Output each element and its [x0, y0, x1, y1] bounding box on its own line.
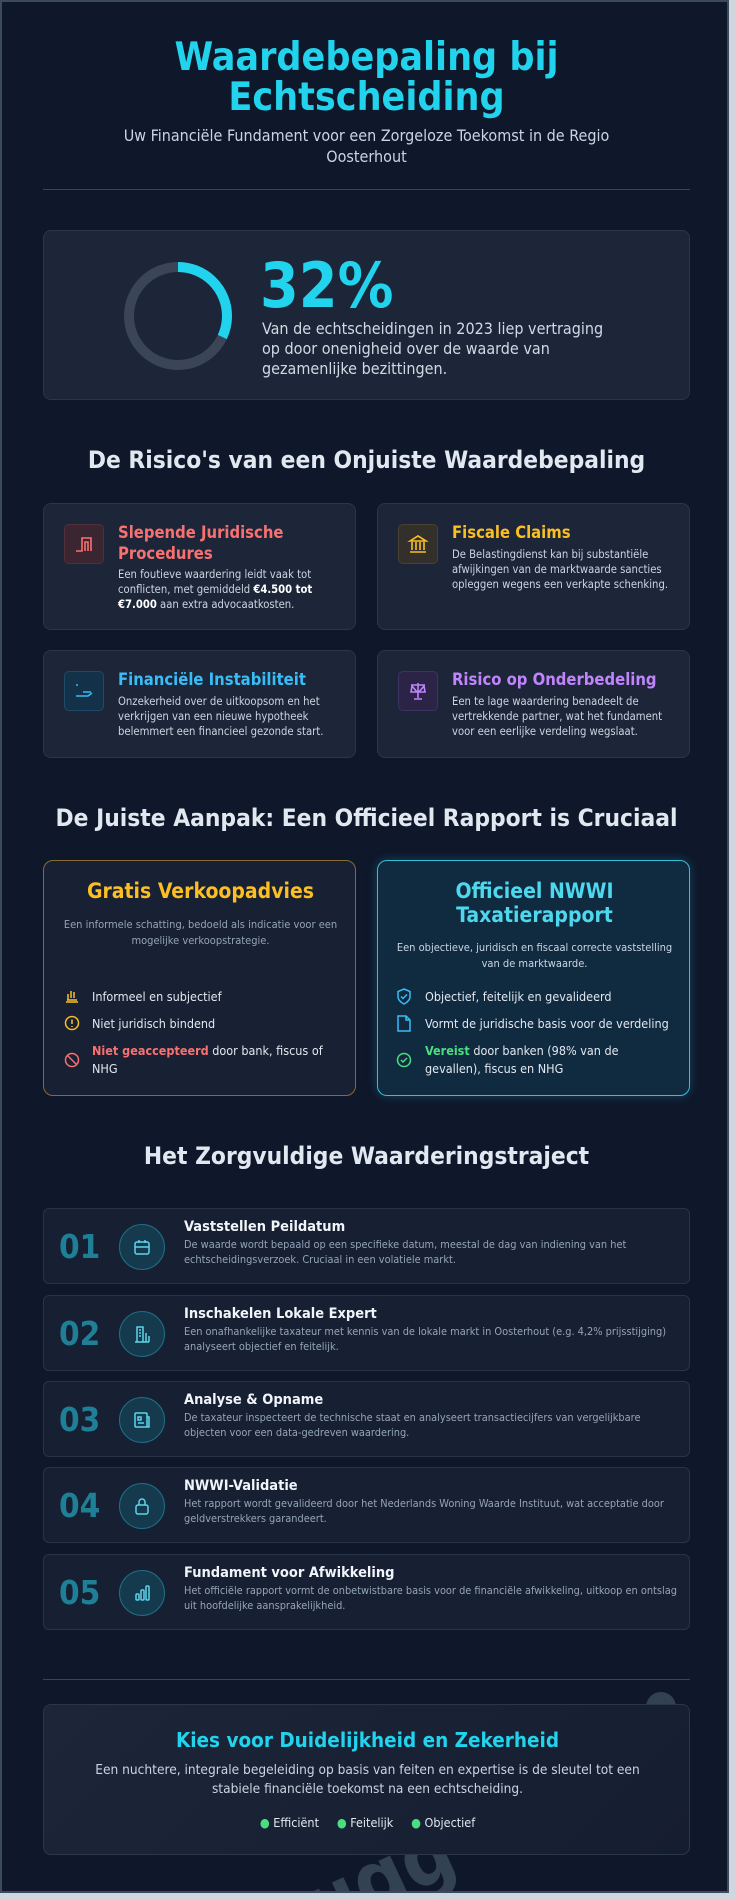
- step 03: [43, 1381, 690, 1457]
- list: nadelen: Niet juridisch bindend: [92, 1016, 215, 1031]
- step 02: Een onafhankelijke taxateur met kennis van de lokale markt in Oosterhout (e.g. 4,2% prijsstijging) analyseert objectief en feitelijk.: [184, 1325, 666, 1353]
- icon: bank: [398, 524, 438, 564]
- panel: juridische procedures: Een foutieve waardering leidt vaak tot conflicten, met gemiddeld €4.500 tot €7.000 aan extra advocaatkosten.: [118, 568, 312, 611]
- icon: building: [64, 524, 104, 564]
- list: nadelen: Niet geaccepteerd door bank, fiscus of NHG: [92, 1043, 323, 1076]
- icon: money hand: [64, 671, 104, 711]
- panel: gratis verkoopadvies: [43, 860, 356, 1096]
- list: voordelen: Vormt de juridische basis voor de verdeling: [425, 1016, 669, 1031]
- step 01: 01: [59, 1227, 100, 1266]
- step 05: Het officiële rapport vormt de onbetwistbare basis voor de financiële afwikkeling, uitkoop en ontslag uit hoofdelijke aansprakelijkheid.: [184, 1584, 677, 1612]
- list: voordelen: Vereist door banken (98% van de gevallen), fiscus en NHG: [425, 1043, 619, 1076]
- panel: juridische procedures: [43, 503, 356, 630]
- step 02: Inschakelen Lokale Expert: [184, 1306, 377, 1322]
- step 04: 04: [59, 1486, 100, 1525]
- panel: call to action: Kies voor Duidelijkheid en Zekerheid: [176, 1728, 559, 1752]
- step 01: [43, 1208, 690, 1284]
- panel: onderbedeling: Risico op Onderbedeling: [452, 670, 657, 689]
- step 05: 05: [59, 1573, 100, 1612]
- panel: financiele instabiliteit: [43, 650, 356, 758]
- panel: fiscale claims: [377, 503, 690, 630]
- icon: scale: [398, 671, 438, 711]
- title: Waardebepaling bij: [174, 35, 559, 80]
- step 02: 02: [59, 1314, 100, 1353]
- step 02: [43, 1295, 690, 1371]
- stat text: Van de echtscheidingen in 2023 liep vertraging op door onenigheid over de waarde van gezamenlijke bezittingen.: [262, 319, 603, 378]
- stat number: 32%: [260, 249, 394, 322]
- panel: onderbedeling: [377, 650, 690, 758]
- panel: gratis verkoopadvies: Een informele schatting, bedoeld als indicatie voor een mogelijke verkoopstrategie.: [64, 918, 337, 947]
- donut chart 32%: [124, 262, 232, 370]
- icon: warning: [64, 1016, 80, 1030]
- heading: risks: De Risico's van een Onjuiste Waardebepaling: [88, 445, 645, 474]
- panel: fiscale claims: Fiscale Claims: [452, 523, 571, 542]
- panel: call to action: Een nuchtere, integrale begeleiding op basis van feiten en expertise is de sleutel tot een stabiele financiële toekomst na een echtscheiding.: [95, 1762, 640, 1797]
- step 05: [43, 1554, 690, 1630]
- panel: officieel rapport: Taxatierapport: [456, 903, 613, 927]
- panel: call to action: [43, 1704, 690, 1855]
- list: voordelen: Objectief, feitelijk en gevalideerd: [425, 989, 612, 1004]
- panel: officieel rapport: Officieel NWWI: [455, 879, 614, 903]
- title: Echtscheiding: [228, 75, 505, 120]
- heading: approach: De Juiste Aanpak: Een Officieel Rapport is Cruciaal: [56, 803, 677, 832]
- list: nadelen: Informeel en subjectief: [92, 989, 222, 1004]
- title: [174, 35, 559, 120]
- step 04: NWWI-Validatie: [184, 1478, 298, 1494]
- panel: fiscale claims: De Belastingdienst kan bij substantiële afwijkingen van de marktwaarde sancties opleggen wegens een verkapte schenking.: [452, 548, 668, 591]
- step 05: Fundament voor Afwikkeling: [184, 1565, 394, 1581]
- step 03: Analyse & Opname: [184, 1392, 323, 1408]
- list: voordelen: [396, 988, 669, 1076]
- panel: gratis verkoopadvies: Gratis Verkoopadvies: [87, 879, 314, 903]
- panel: onderbedeling: Een te lage waardering benadeelt de vertrekkende partner, wat het fundament voor een eerlijke verdeling wegslaat.: [452, 695, 662, 738]
- icon: document: [397, 1015, 411, 1032]
- step 03: De taxateur inspecteert de technische staat en analyseert transactiecijfers van vergelijkbare objecten voor een data-gedreven waardering.: [184, 1411, 640, 1439]
- icon: check: [396, 1052, 412, 1068]
- panel: financiele instabiliteit: Onzekerheid over de uitkoopsom en het verkrijgen van een nieuwe hypotheek belemmert een financieel gezonde start.: [118, 695, 323, 738]
- icon: forbidden: [64, 1052, 80, 1068]
- list: nadelen: [64, 989, 323, 1076]
- step 04: Het rapport wordt gevalideerd door het Nederlands Woning Waarde Instituut, wat acceptatie door geldverstrekkers garandeert.: [184, 1497, 664, 1525]
- panel: officieel rapport: Een objectieve, juridisch en fiscaal correcte vaststelling van de marktwaarde.: [397, 941, 672, 970]
- icon: hand: [66, 991, 78, 1003]
- step 03: 03: [59, 1400, 100, 1439]
- panel: juridische procedures: Slepende Juridische Procedures: [118, 523, 283, 563]
- panel: officieel rapport: [377, 860, 690, 1096]
- step 04: [43, 1467, 690, 1543]
- step 01: Vaststellen Peildatum: [184, 1219, 345, 1235]
- panel: financiele instabiliteit: Financiële Instabiliteit: [118, 670, 306, 689]
- icon: shield: [397, 988, 411, 1005]
- step 01: De waarde wordt bepaald op een specifieke datum, meestal de dag van indiening van het echtscheidingsverzoek. Cruciaal in een volatiele markt.: [184, 1238, 626, 1266]
- checklist: ● Efficiënt ● Feitelijk ● Objectief: [260, 1815, 475, 1830]
- heading: traject: Het Zorgvuldige Waarderingstraject: [144, 1141, 589, 1170]
- subtitle: Uw Financiële Fundament voor een Zorgeloze Toekomst in de Regio Oosterhout: [124, 126, 609, 166]
- panel: statistic: [43, 230, 690, 400]
